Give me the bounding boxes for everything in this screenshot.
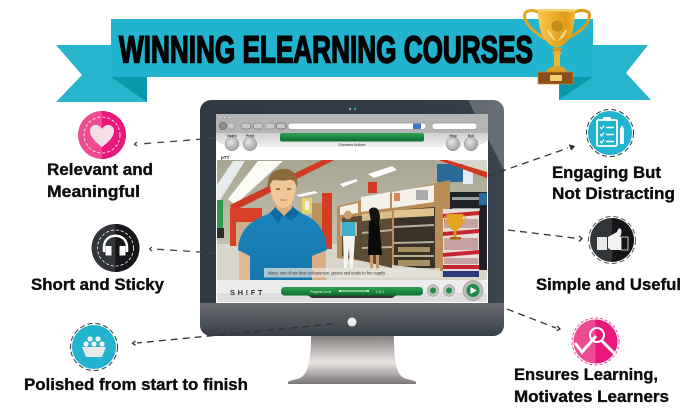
player control bar: Progress Level (310, 290, 332, 294)
item: relevant and meaningful (47, 111, 153, 201)
man in blue polo (238, 169, 327, 280)
screen (216, 114, 488, 303)
course toolbar: Help (449, 134, 457, 138)
arrow: ensures (507, 309, 560, 330)
small trophy (445, 214, 465, 240)
player control bar (217, 280, 487, 302)
red roof sign (436, 160, 487, 176)
monitor body (200, 100, 504, 336)
icon: checklist (586, 110, 634, 156)
item: polished from start to finish (24, 324, 248, 394)
label: Simple and Useful (536, 276, 681, 294)
label: Polished from start to finish (24, 376, 248, 394)
icon: headphones (92, 224, 140, 272)
power button (348, 318, 356, 326)
item: simple and useful (536, 216, 681, 294)
icon: magnifier with check (572, 318, 619, 365)
icon: bowl (70, 324, 118, 370)
label: Motivates Learners (514, 388, 669, 406)
caption bar: Many, one of our best salesperson, greets and tends to her supply. (268, 270, 386, 276)
caption bar (264, 268, 440, 278)
course toolbar: Scenario builder (338, 143, 366, 147)
dark back shelves (450, 192, 487, 270)
course toolbar: Print (246, 134, 255, 138)
monitor chin (200, 303, 504, 336)
label: Meaningful (47, 183, 140, 201)
label: Relevant and (47, 161, 153, 179)
arrow: simple (508, 230, 582, 242)
icon: heart (78, 111, 126, 159)
course toolbar: Exit (468, 134, 475, 138)
monitor (200, 100, 504, 384)
slide label: pTT (221, 155, 230, 160)
monitor stand (288, 336, 416, 384)
course toolbar: Notes (227, 134, 237, 138)
item: ensures learning (514, 318, 669, 406)
woman in black (368, 208, 382, 270)
browser toolbar (216, 114, 488, 133)
woman in teal (340, 210, 357, 268)
icon: thumbs up (588, 216, 636, 264)
ribbon banner (56, 19, 651, 102)
player control bar: 1 of 1 (376, 290, 384, 294)
course toolbar (216, 133, 488, 151)
arrow: engaging (488, 145, 574, 176)
product display (443, 209, 479, 277)
player control bar: SH!FT (230, 288, 265, 297)
label: Not Distracting (552, 185, 675, 203)
arrow: polished (132, 324, 333, 345)
shelf unit (337, 180, 450, 272)
store scene (217, 160, 487, 280)
item: engaging but not distracting (552, 110, 675, 203)
arrow: relevant (134, 138, 216, 146)
item: short and sticky (31, 224, 165, 294)
label: Engaging But (552, 164, 662, 182)
arrow: short (150, 247, 216, 253)
label: Ensures Learning, (514, 366, 658, 384)
label: Short and Sticky (31, 276, 165, 294)
icon: gold trophy (524, 9, 590, 84)
